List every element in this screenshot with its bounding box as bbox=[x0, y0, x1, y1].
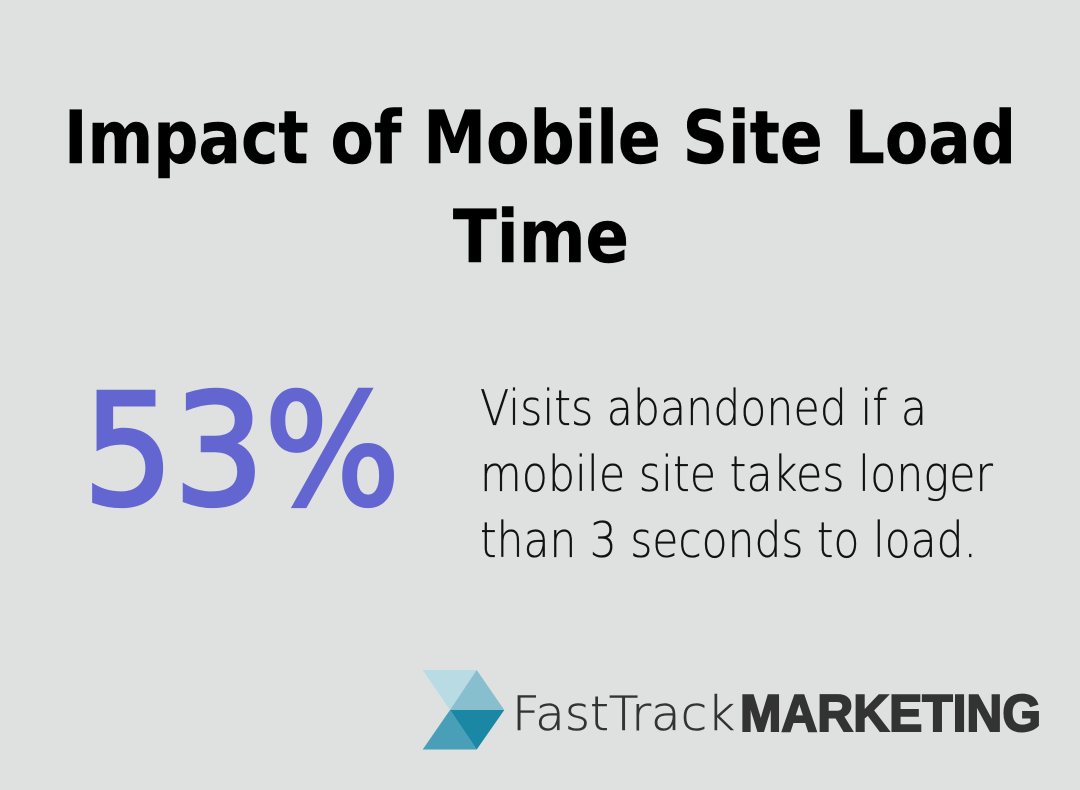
logo wordmark bbox=[512, 685, 1041, 743]
title bbox=[64, 96, 1016, 280]
title: Time bbox=[453, 195, 629, 280]
logo: FastTrack Marketing bbox=[423, 670, 1041, 750]
statistic: 53%: 53% bbox=[83, 362, 400, 541]
logo icon bbox=[423, 670, 504, 750]
description text: mobile site takes longer bbox=[480, 446, 994, 503]
logo wordmark: FastTrack bbox=[512, 687, 735, 742]
logo wordmark: MARKETING bbox=[740, 685, 1041, 743]
description text bbox=[480, 380, 994, 569]
description text: than 3 seconds to load. bbox=[480, 512, 977, 569]
description text: Visits abandoned if a bbox=[480, 380, 927, 437]
